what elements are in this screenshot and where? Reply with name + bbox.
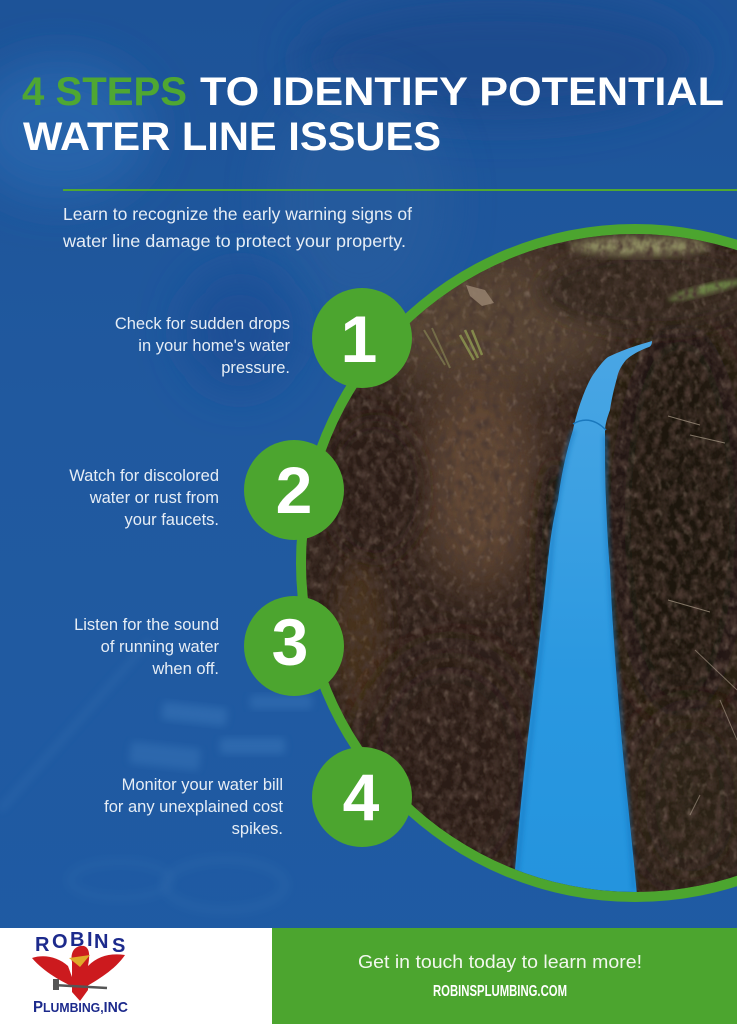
number badge 1: 1 — [341, 302, 377, 376]
step 4 text — [104, 776, 283, 838]
step 4 text: for any unexplained cost — [104, 798, 283, 816]
intro text: Learn to recognize the early warning signs of — [63, 204, 412, 224]
step 2 text: Watch for discolored — [69, 467, 219, 485]
logo wordmark top: ROBINS — [35, 929, 125, 957]
number badge 2: 2 — [276, 453, 312, 527]
number badge 4 — [312, 747, 412, 847]
step 1 text — [115, 315, 291, 377]
title: TO IDENTIFY POTENTIAL — [200, 70, 724, 114]
title — [22, 70, 724, 159]
intro text — [62, 204, 412, 251]
footer call to action panel — [272, 928, 737, 1024]
step 2 text — [69, 467, 219, 529]
trench wall lighter soil — [360, 250, 620, 390]
number badge 3: 3 — [272, 605, 308, 679]
call to action text: Get in touch today to learn more! — [358, 951, 642, 972]
step 1 text: pressure. — [221, 359, 290, 377]
soil texture — [290, 220, 737, 910]
number badge 4: 4 — [343, 760, 380, 834]
title: 4 STEPS — [22, 70, 187, 114]
number badge 3 — [244, 596, 344, 696]
step 4 text: spikes. — [232, 820, 283, 838]
website: ROBINSPLUMBING.COM — [433, 983, 567, 1000]
step 3 — [74, 596, 344, 696]
blue pipe — [513, 341, 652, 895]
step 3 text: when off. — [151, 660, 219, 678]
stones and grass — [424, 285, 737, 815]
number badge 2 — [244, 440, 344, 540]
step 1 text: Check for sudden drops — [115, 315, 290, 333]
intro text: water line damage to protect your property. — [62, 231, 406, 251]
step 3 text — [74, 616, 219, 678]
footer logo panel — [0, 928, 272, 1024]
number badge 1 — [312, 288, 412, 388]
step 2 — [69, 440, 344, 540]
title: WATER LINE ISSUES — [23, 115, 441, 159]
step 1 — [115, 288, 412, 388]
step 2 text: water or rust from — [89, 489, 219, 507]
step 2 text: your faucets. — [125, 511, 219, 529]
step 3 text: of running water — [101, 638, 219, 656]
step 4 text: Monitor your water bill — [122, 776, 283, 794]
step 1 text: in your home's water — [138, 337, 291, 355]
step 3 text: Listen for the sound — [74, 616, 219, 634]
circular photo of trench and blue pipe — [290, 220, 737, 910]
icon: red bird with pipe wrench — [32, 946, 125, 1001]
logo wordmark bottom: PLUMBING,INC — [33, 999, 128, 1016]
step 4 — [104, 747, 412, 847]
